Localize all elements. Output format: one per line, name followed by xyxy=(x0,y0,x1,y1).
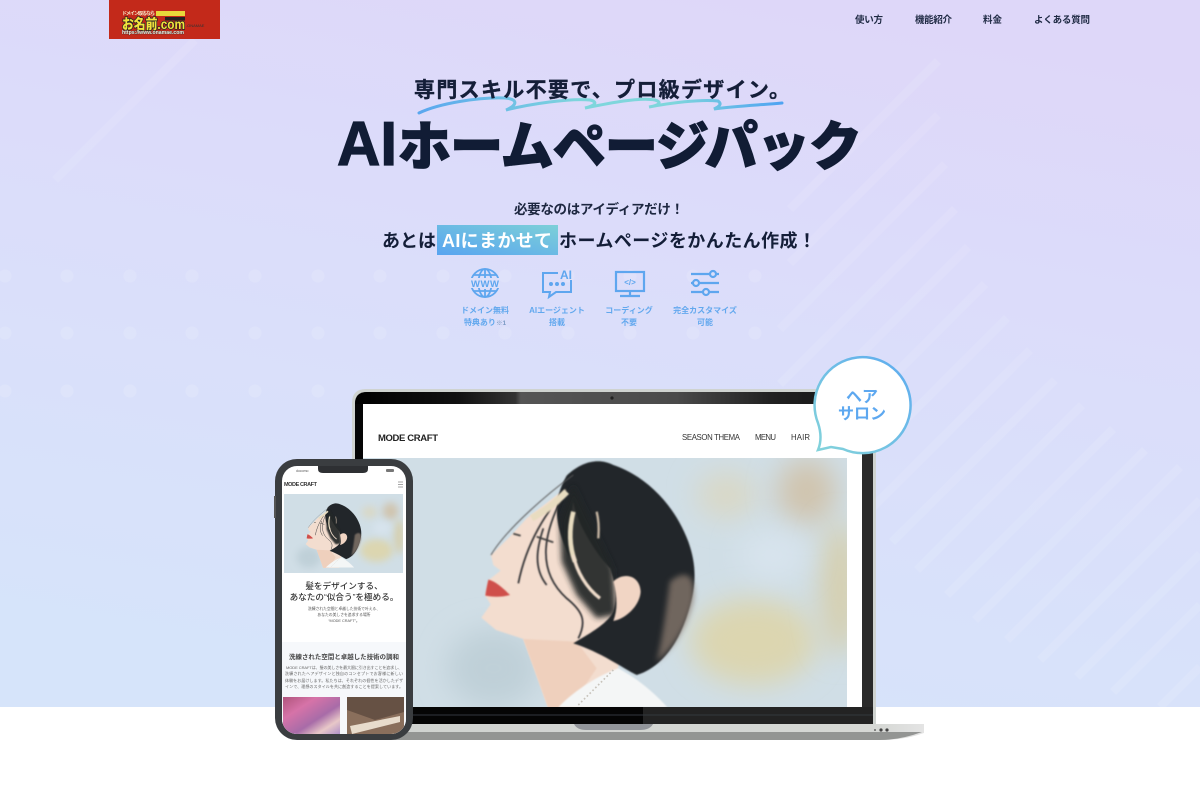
phone thumbnail images xyxy=(283,697,340,734)
feature labels: 可能 xyxy=(697,317,713,327)
icon: domain www xyxy=(470,269,500,297)
phone body copy: “MODE CRAFT”。 xyxy=(328,619,360,623)
lead copy with highlight: あとは xyxy=(382,231,436,251)
phone body xyxy=(275,459,413,740)
main title: ホームページパック xyxy=(398,118,862,177)
phone section: 洗練されたヘアデザインと独自のコンセプトでお客様に新しい xyxy=(285,670,403,676)
hero photo xyxy=(363,458,847,707)
logo: https://www.onamae.com xyxy=(122,30,185,36)
phone body copy: 洗練された空間と卓越した技術で叶える、 xyxy=(308,606,380,611)
phone section: 洗練された空間と卓越した技術の調和 xyxy=(289,652,399,661)
phone screen: docomo xyxy=(296,469,309,473)
phone section: 体験をお届けします。私たちは、それぞれの個性を活かしたデザ xyxy=(285,677,403,683)
main title: AI xyxy=(337,110,397,179)
navigation: 機能紹介 xyxy=(915,14,952,26)
feature labels: 搭載 xyxy=(549,317,565,327)
phone headline: 髪をデザインする、 xyxy=(305,580,383,591)
feature icons xyxy=(461,268,737,327)
highlight: AIにまかせて xyxy=(442,231,552,251)
phone site header: MODE CRAFT xyxy=(284,482,318,488)
feature labels xyxy=(461,305,737,327)
site header: MODE CRAFT xyxy=(378,433,438,444)
feature labels: 特典あり※1 xyxy=(464,317,506,327)
sub copy: 必要なのはアイディアだけ！ xyxy=(514,201,684,217)
phone section xyxy=(282,642,406,734)
icon: AI agent xyxy=(543,268,572,297)
tagline with wavy underline: 専門スキル不要で、プロ級デザイン。 xyxy=(414,78,790,102)
site header: MENU xyxy=(755,433,776,442)
logo xyxy=(109,0,220,39)
phone body copy: あなたの美しさを追求する場所 xyxy=(317,612,371,617)
icon: no coding xyxy=(616,272,644,296)
feature labels: コーディング xyxy=(605,305,653,315)
site header: HAIR xyxy=(791,433,810,442)
site header: SEASON THEMA xyxy=(682,433,741,442)
navigation: 使い方 xyxy=(855,14,883,26)
laptop lid frame xyxy=(352,389,876,725)
feature labels: AIエージェント xyxy=(529,306,585,315)
laptop screen xyxy=(363,404,862,707)
notch xyxy=(318,466,368,473)
feature labels: ドメイン無料 xyxy=(461,305,509,315)
phone headline xyxy=(290,581,393,601)
site header xyxy=(378,433,810,444)
trackpad notch xyxy=(574,724,653,730)
feature labels: 不要 xyxy=(621,318,637,327)
icon: domain www: WWW xyxy=(471,279,499,290)
phone headline: あなたの“似合う”を極める。 xyxy=(290,591,398,602)
phone section: インで、理想のスタイルを共に創造することを提案しています。 xyxy=(285,683,403,689)
tagline with wavy underline xyxy=(414,78,790,113)
smartphone mockup xyxy=(270,459,413,740)
phone photo xyxy=(284,494,403,573)
icon: no coding: </> xyxy=(624,278,636,287)
ports xyxy=(874,728,889,732)
highlight xyxy=(437,225,558,255)
wavy underline xyxy=(419,98,782,113)
logo: ドメイン取るなら xyxy=(122,10,155,17)
icon: AI agent: AI xyxy=(560,268,572,282)
navigation xyxy=(855,14,1090,26)
phone screen xyxy=(270,466,406,734)
phone section: MODE CRAFTは、髪の美しさを最大限に引き出すことを追求し、 xyxy=(286,664,402,670)
speech bubble xyxy=(815,357,911,453)
laptop mockup xyxy=(300,389,924,745)
navigation: よくある質問 xyxy=(1034,14,1090,26)
lead copy with highlight: ホームページをかんたん作成！ xyxy=(559,230,816,251)
logo: お名前.com xyxy=(122,16,185,32)
icon: customization sliders xyxy=(691,271,719,295)
phone body copy xyxy=(308,606,380,623)
navigation: 料金 xyxy=(983,14,1002,26)
lead copy with highlight xyxy=(382,225,816,255)
speech bubble: ヘア xyxy=(846,389,878,406)
feature labels: 完全カスタマイズ xyxy=(673,305,737,315)
laptop base xyxy=(300,724,924,740)
logo: .ONAMAE xyxy=(186,23,205,28)
speech bubble: サロン xyxy=(838,405,886,423)
webcam xyxy=(610,396,614,400)
